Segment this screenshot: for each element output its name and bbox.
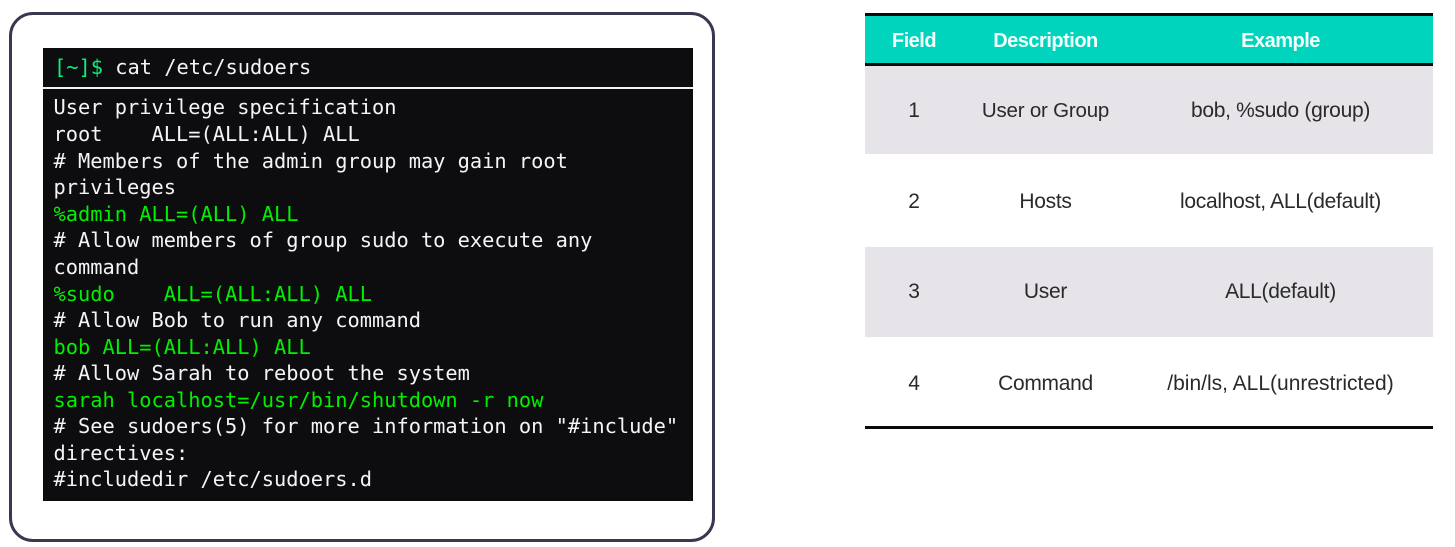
table header [865,13,1433,66]
terminal prompt bar [43,48,693,89]
terminal output: %sudo ALL=(ALL:ALL) ALL [54,282,372,306]
terminal output [54,95,678,491]
row 3: ALL(default) [1225,280,1336,303]
terminal prompt bar: [~]$ cat /etc/sudoers [54,55,311,79]
terminal output: # Allow members of group sudo to execute any [54,228,592,252]
terminal output: # Allow Bob to run any command [54,308,421,332]
table header: Field [892,30,936,52]
terminal output: privileges [54,175,176,199]
row 2: localhost, ALL(default) [1180,190,1381,212]
terminal output: # Allow Sarah to reboot the system [54,361,470,385]
row 4 [865,337,1433,429]
table header: Description [993,30,1098,52]
terminal output: #includedir /etc/sudoers.d [54,467,372,491]
terminal output: bob ALL=(ALL:ALL) ALL [54,335,311,359]
row 3: 3 [908,280,920,303]
panel: terminal window [43,48,693,501]
row 2: 2 [908,190,920,212]
row 1: 1 [908,99,920,122]
row 3 [865,247,1433,337]
row 1: bob, %sudo (group) [1191,99,1370,122]
terminal output: # See sudoers(5) for more information on "#include" [54,414,678,438]
terminal output: User privilege specification [54,95,396,119]
terminal output: %admin ALL=(ALL) ALL [54,202,298,226]
row 4: Command [998,372,1093,394]
terminal output: sarah localhost=/usr/bin/shutdown -r now [54,388,543,412]
row 4: 4 [908,372,920,394]
row 2 [865,154,1433,247]
terminal output: # Members of the admin group may gain root [54,149,568,173]
terminal output: directives: [54,441,188,465]
row 4: /bin/ls, ALL(unrestricted) [1167,372,1394,394]
row 3: User [1024,280,1067,303]
table header: Example [1241,30,1320,52]
row 1 [865,66,1433,154]
table: sudoers fields [865,13,1433,429]
row 2: Hosts [1019,190,1072,212]
terminal output: command [54,255,139,279]
terminal output: root ALL=(ALL:ALL) ALL [54,122,360,146]
panel: terminal card frame [9,12,715,542]
row 1: User or Group [982,99,1109,122]
